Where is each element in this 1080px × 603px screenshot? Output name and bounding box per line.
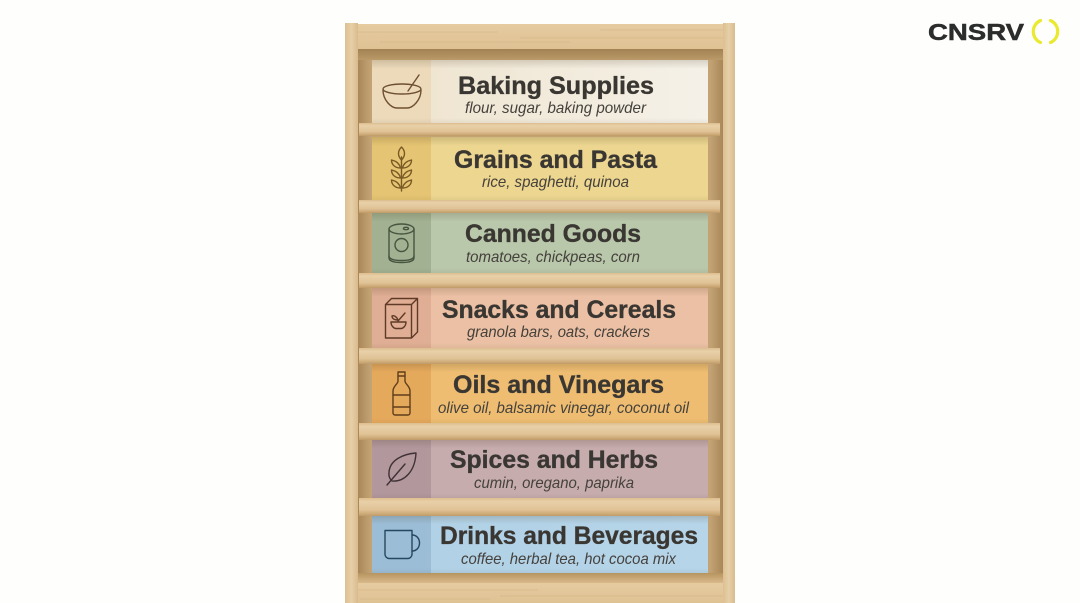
left post bbox=[345, 23, 358, 603]
label: Snacks and Cereals bbox=[372, 288, 708, 348]
items: granola bars, oats, crackers bbox=[467, 324, 650, 341]
logo ring bbox=[1033, 20, 1058, 42]
label: Canned Goods bbox=[372, 213, 708, 273]
heading: Baking Supplies bbox=[458, 72, 654, 100]
items: tomatoes, chickpeas, corn bbox=[466, 249, 640, 266]
logo: CNSRV bbox=[928, 19, 1058, 45]
heading: Canned Goods bbox=[465, 220, 641, 248]
heading: Grains and Pasta bbox=[454, 146, 658, 174]
items: olive oil, balsamic vinegar, coconut oil bbox=[438, 400, 689, 417]
icon: bottle bbox=[393, 372, 410, 415]
label: Grains and Pasta bbox=[372, 137, 708, 200]
icon: mug bbox=[385, 530, 420, 558]
label: Drinks and Beverages bbox=[372, 516, 708, 573]
label: Baking Supplies bbox=[372, 60, 708, 123]
items: flour, sugar, baking powder bbox=[465, 100, 647, 117]
heading: Oils and Vinegars bbox=[453, 371, 664, 399]
items: coffee, herbal tea, hot cocoa mix bbox=[461, 551, 677, 568]
heading: Snacks and Cereals bbox=[442, 296, 676, 324]
icon: leaf bbox=[387, 453, 416, 485]
top board bbox=[358, 24, 723, 49]
items: cumin, oregano, paprika bbox=[474, 475, 634, 492]
icon: mixing bowl bbox=[383, 75, 421, 108]
shelf back panel bbox=[358, 46, 723, 586]
icon: wheat bbox=[392, 147, 412, 191]
wooden shelf unit bbox=[345, 23, 735, 603]
logo wordmark: CNSRV bbox=[928, 19, 1025, 45]
icon: cereal box bbox=[386, 298, 418, 338]
shelf boards bbox=[359, 123, 720, 516]
label: Spices and Herbs bbox=[372, 440, 708, 498]
bottom board bbox=[358, 573, 723, 603]
label: Oils and Vinegars bbox=[372, 364, 708, 423]
heading: Spices and Herbs bbox=[450, 446, 658, 474]
heading: Drinks and Beverages bbox=[440, 522, 698, 550]
items: rice, spaghetti, quinoa bbox=[482, 174, 629, 191]
right post bbox=[723, 23, 735, 603]
icon: can bbox=[389, 224, 414, 262]
